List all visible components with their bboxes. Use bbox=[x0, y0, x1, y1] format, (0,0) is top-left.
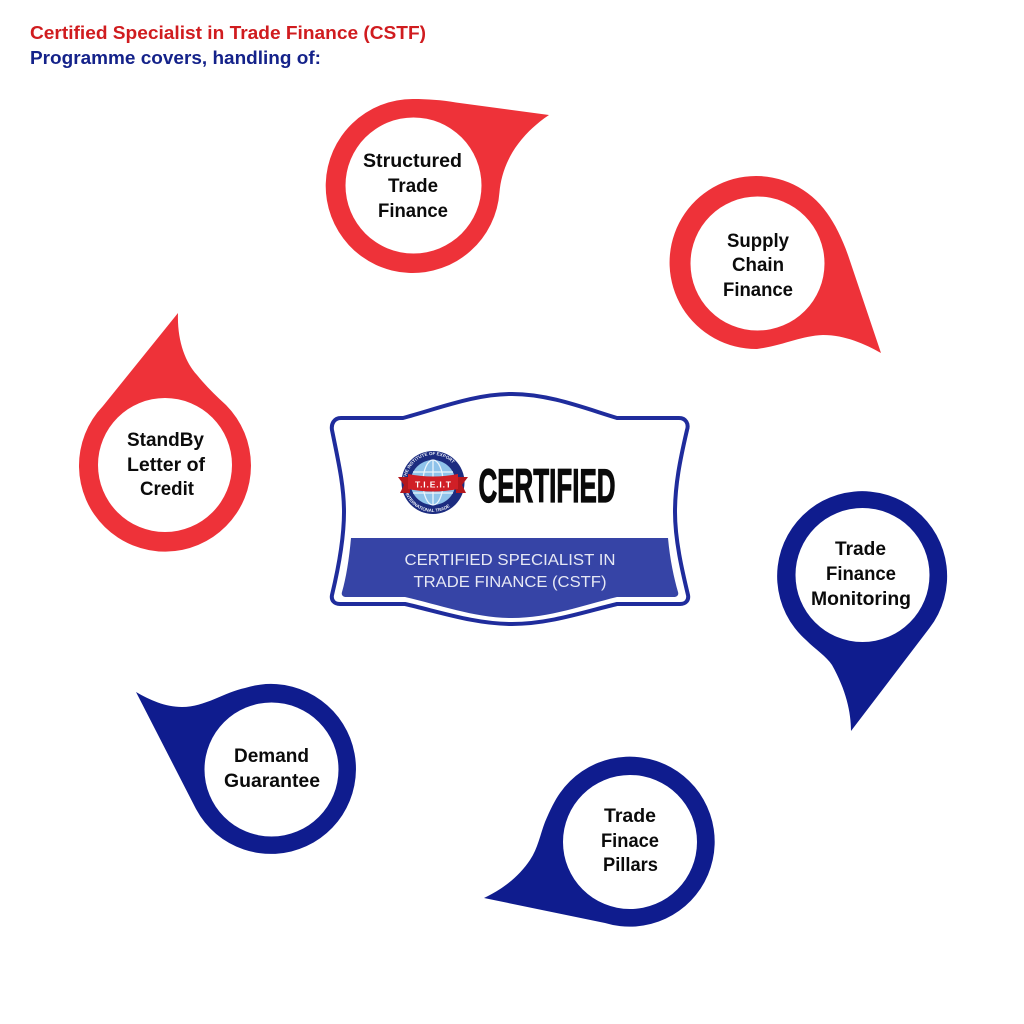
pin: Structured Trade Finance: Structured bbox=[363, 151, 462, 172]
pin: Trade Finace Pillars bbox=[484, 757, 715, 927]
badge outline bbox=[332, 394, 688, 624]
pin: StandBy Letter of Credit: Credit bbox=[140, 479, 195, 500]
pin: Demand Guarantee bbox=[136, 684, 356, 854]
title: Certified Specialist in Trade Finance (CSTF) bbox=[30, 22, 426, 43]
word CERTIFIED: CERTIFIED bbox=[478, 459, 616, 512]
logo: T.I.E.I.T globe seal: T.I.E.I.T bbox=[415, 480, 452, 490]
pin: Trade Finance Monitoring bbox=[777, 491, 947, 731]
pin: Structured Trade Finance: Finance bbox=[378, 201, 448, 222]
pin: Structured Trade Finance: Trade bbox=[388, 176, 438, 197]
pin: StandBy Letter of Credit bbox=[79, 313, 251, 552]
pin: Supply Chain Finance: Supply bbox=[727, 231, 789, 252]
pin: Trade Finace Pillars: Finace bbox=[601, 831, 659, 852]
pin: Demand Guarantee: Guarantee bbox=[224, 771, 320, 792]
pin: StandBy Letter of Credit: StandBy bbox=[127, 430, 204, 451]
badge blue band bbox=[342, 538, 678, 618]
pin: Supply Chain Finance: Finance bbox=[723, 280, 793, 301]
pin: Trade Finance Monitoring: Finance bbox=[826, 564, 896, 585]
pin: Trade Finace Pillars: Pillars bbox=[603, 855, 658, 876]
logo: T.I.E.I.T globe seal bbox=[398, 451, 468, 514]
logo: T.I.E.I.T globe seal: THE INSTITUTE OF EXPORT bbox=[403, 452, 455, 477]
pin: Trade Finance Monitoring: Monitoring bbox=[811, 589, 911, 610]
title: Programme covers, handling of: bbox=[30, 47, 321, 68]
badge band text: CERTIFIED SPECIALIST IN bbox=[404, 552, 616, 569]
pin: Trade Finance Monitoring: Trade bbox=[835, 539, 886, 560]
badge band text: TRADE FINANCE (CSTF) bbox=[414, 574, 606, 591]
badge band text bbox=[404, 552, 616, 591]
pin: Supply Chain Finance bbox=[670, 176, 881, 353]
pin: Demand Guarantee: Demand bbox=[234, 746, 309, 767]
pin: Structured Trade Finance bbox=[326, 99, 549, 273]
title bbox=[30, 22, 426, 68]
pin: Trade Finace Pillars: Trade bbox=[604, 806, 656, 827]
pin: Supply Chain Finance: Chain bbox=[732, 255, 784, 276]
pin: StandBy Letter of Credit: Letter of bbox=[127, 455, 206, 476]
central certified badge bbox=[330, 392, 690, 626]
logo: T.I.E.I.T globe seal: & INTERNATIONAL TRADE bbox=[406, 493, 450, 512]
